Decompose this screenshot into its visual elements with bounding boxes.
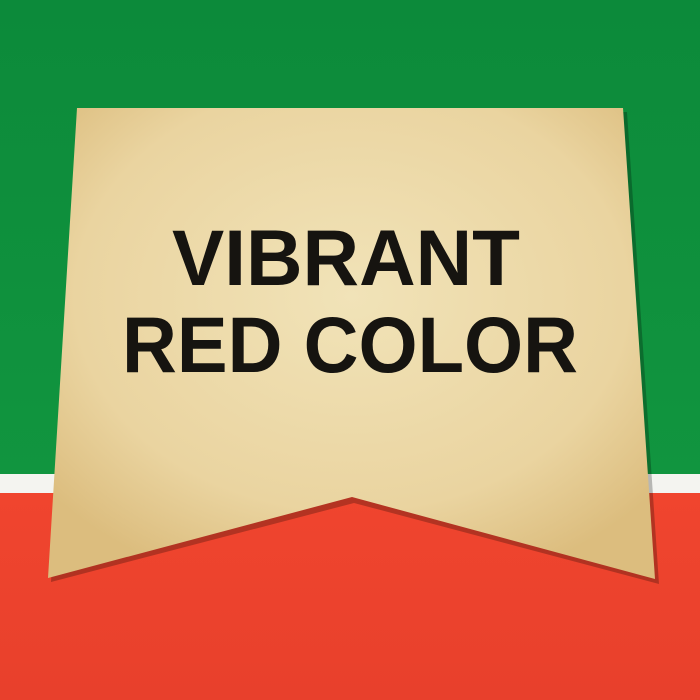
background: green band <box>0 0 700 474</box>
banner <box>48 108 659 584</box>
title text <box>122 213 578 389</box>
background: white stripe <box>0 474 700 493</box>
title text: VIBRANT <box>172 213 520 302</box>
title text: RED COLOR <box>122 300 578 389</box>
background: red band <box>0 493 700 700</box>
